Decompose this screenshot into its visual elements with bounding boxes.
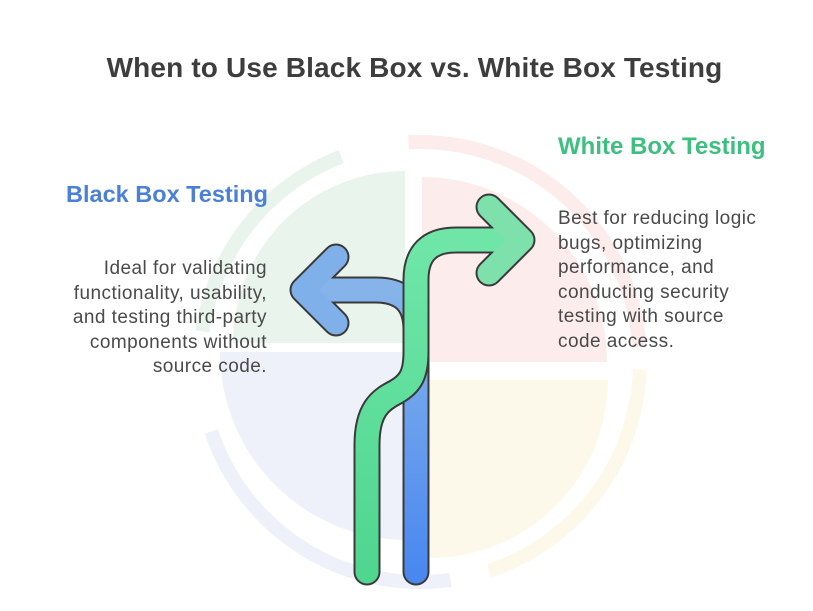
text: black box description <box>73 258 267 377</box>
text: black box description: components without <box>90 332 267 352</box>
heading: Black Box Testing: Black Box Testing <box>66 181 268 207</box>
text: black box description: source code. <box>153 356 267 377</box>
arrow: green right <box>367 207 522 572</box>
text: white box description: performance, and <box>558 257 714 278</box>
text: white box description: Best for reducing logic <box>558 208 756 229</box>
quadrant: green <box>233 171 405 343</box>
text: black box description: Ideal for validating <box>104 258 267 279</box>
text: white box description: testing with source <box>558 306 724 327</box>
text: white box description <box>558 208 756 352</box>
quadrant: blue <box>220 352 408 540</box>
quadrant: red <box>422 177 607 362</box>
title: When to Use Black Box vs. White Box Testing <box>107 52 722 83</box>
arrow: blue left <box>303 257 416 572</box>
text: white box description: code access. <box>558 330 674 352</box>
text: white box description: conducting security <box>558 282 729 302</box>
quadrant: yellow <box>430 380 608 558</box>
text: white box description: bugs, optimizing <box>558 232 702 254</box>
text: black box description: and testing third-party <box>73 307 267 328</box>
outer ring arcs <box>202 142 640 582</box>
heading: White Box Testing: White Box Testing <box>558 133 766 160</box>
text: black box description: functionality, usability, <box>74 282 267 304</box>
